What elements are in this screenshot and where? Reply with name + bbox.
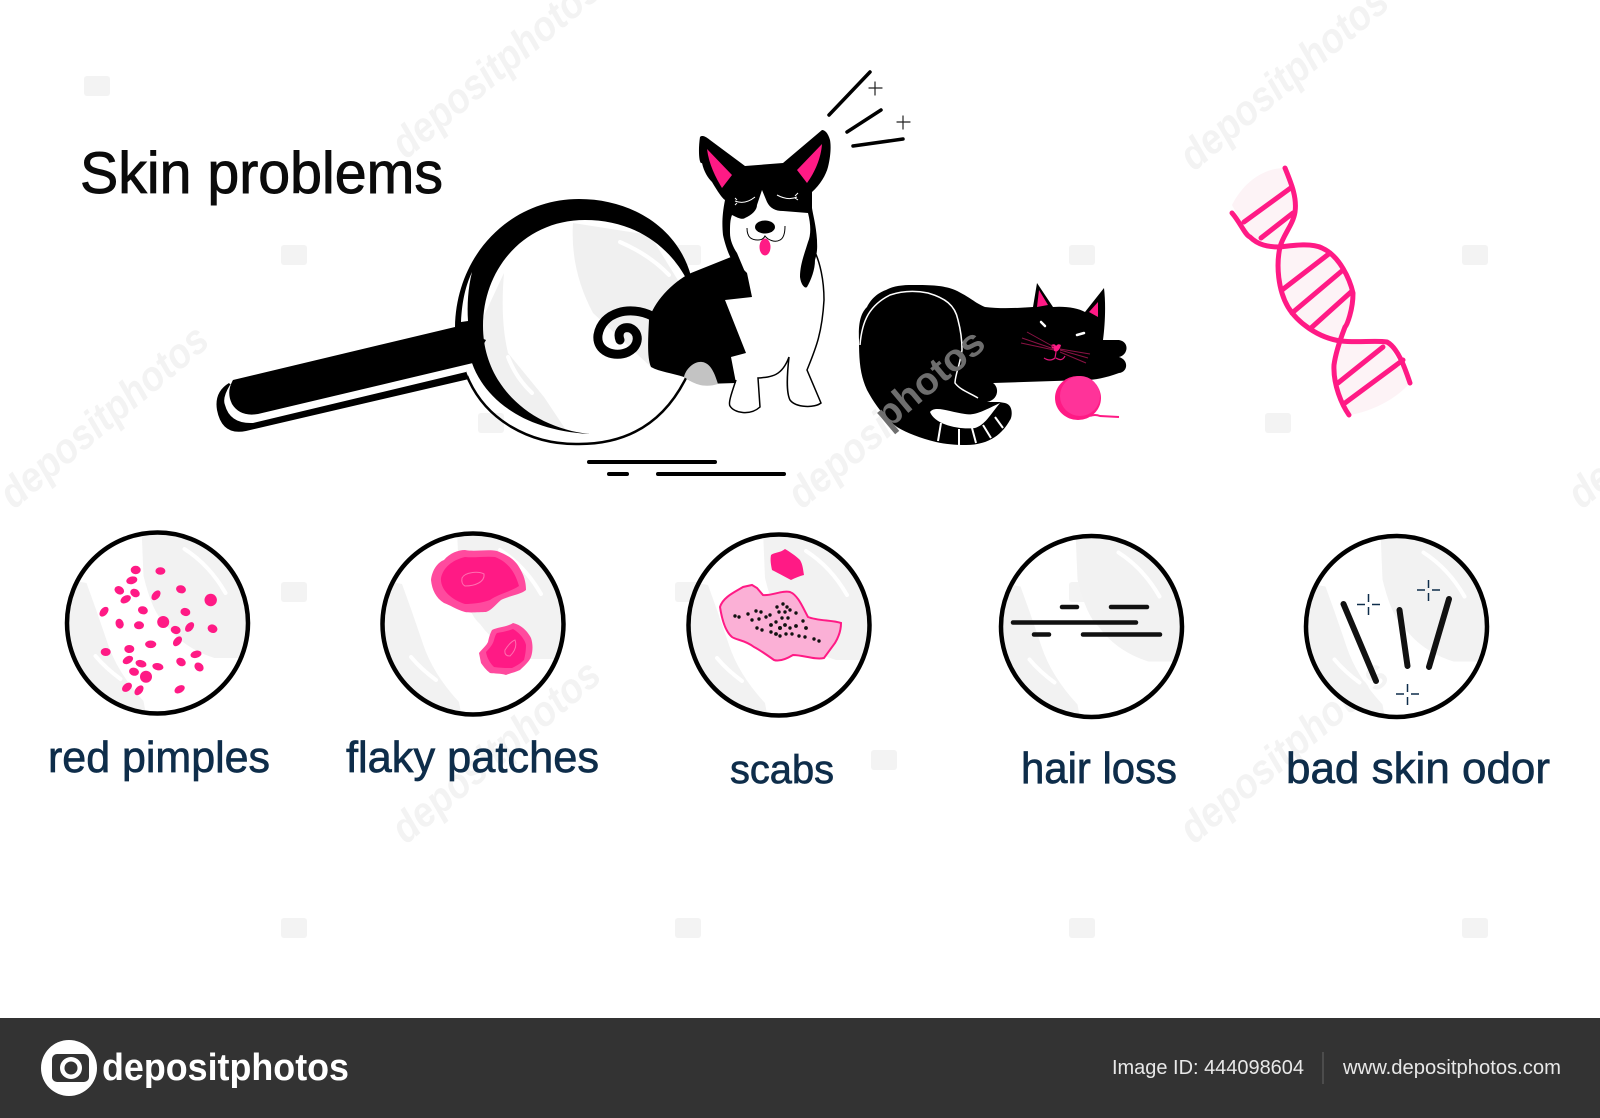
panel: bad skin odor: [1286, 526, 1550, 793]
ground lines: [589, 462, 784, 474]
logo icon: [41, 1040, 97, 1096]
label: flaky patches: [346, 733, 599, 782]
dog muzzle: [747, 226, 785, 241]
cat tail stripes: [938, 417, 1003, 445]
pimples: [98, 566, 219, 697]
website: www.depositphotos.com: [1342, 1057, 1561, 1079]
dog tail: [598, 311, 652, 354]
dog black body: [648, 257, 752, 384]
title: Skin problems: [80, 141, 443, 206]
dog paw: [684, 362, 718, 386]
odor lines: [1344, 599, 1449, 681]
label: scabs: [730, 748, 834, 792]
lens circle: [679, 525, 879, 725]
scab small: [771, 549, 804, 580]
watermark: depositphotos: [1170, 650, 1397, 852]
label: hair loss: [1021, 744, 1177, 793]
dog head: [699, 130, 831, 288]
sparkles: [1357, 580, 1440, 705]
panel: hair loss: [992, 526, 1192, 793]
lens circle: [992, 526, 1192, 726]
image id: Image ID: 444098604: [1112, 1057, 1304, 1079]
panel: red pimples: [48, 523, 270, 782]
yarn ball: [1055, 376, 1119, 420]
watermark: depositphotos: [778, 315, 1005, 517]
cat eyes: [1041, 322, 1084, 335]
dog white body fill: [725, 213, 824, 413]
lens circle: [1296, 526, 1496, 726]
dog tongue: [760, 238, 770, 256]
patches: [431, 550, 532, 675]
label: bad skin odor: [1286, 744, 1550, 793]
icon: dog: [598, 130, 831, 413]
action lines: [829, 72, 910, 146]
logo text: depositphotos: [102, 1047, 349, 1089]
footer bar: [0, 1018, 1600, 1118]
label: red pimples: [48, 733, 270, 782]
separator: [1322, 1052, 1324, 1084]
cat tail gap: [930, 403, 1000, 428]
icon: magnifying glass: [216, 199, 691, 444]
cat nose and whiskers: [1021, 332, 1090, 363]
cat ears: [1037, 290, 1098, 317]
watermark: depositphotos: [382, 650, 609, 852]
watermark on cat: photos: [867, 321, 993, 437]
lens circle: [58, 523, 258, 723]
dog ears: [707, 144, 822, 188]
icon: dna helix: [1232, 168, 1410, 415]
panel: flaky patches: [346, 524, 599, 782]
lens circle: [373, 524, 573, 724]
scab dots: [733, 602, 821, 643]
dog nose: [755, 220, 775, 234]
dog outline: [729, 250, 824, 413]
scab large: [720, 585, 841, 661]
hair lines: [1013, 607, 1160, 634]
icon: cat: [859, 283, 1127, 445]
dog eyelashes: [735, 193, 798, 205]
cat outline: [860, 291, 978, 398]
panel: scabs: [679, 525, 879, 792]
